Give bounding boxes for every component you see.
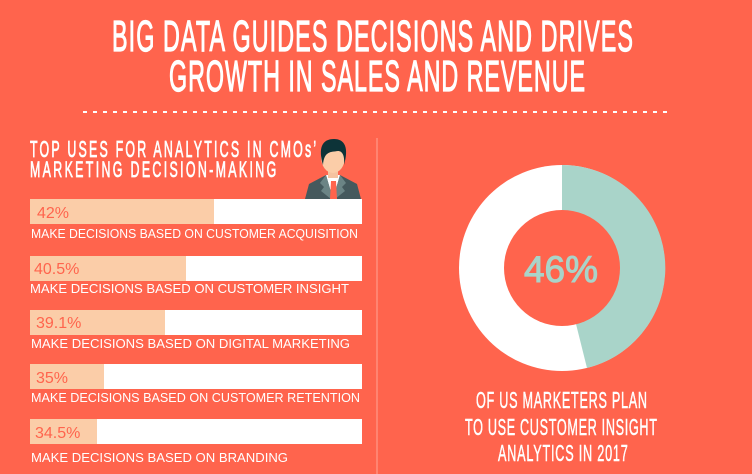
- chart heading: TOP USES FOR ANALYTICS IN CMOs’: [30, 136, 316, 162]
- donut caption: TO USE CUSTOMER INSIGHT: [465, 414, 657, 440]
- donut chart: [459, 165, 665, 371]
- bar: customer insight: MAKE DECISIONS BASED ON CUSTOMER INSIGHT: [30, 281, 349, 296]
- bar: customer acquisition: MAKE DECISIONS BASED ON CUSTOMER ACQUISITION: [31, 226, 358, 241]
- chart heading: MARKETING DECISION-MAKING: [30, 157, 276, 182]
- bar: customer acquisition: 42%: [37, 205, 69, 222]
- chart heading: [30, 136, 316, 182]
- bar: customer acquisition: [30, 199, 362, 241]
- icon: businessman: [305, 139, 361, 199]
- bar: customer retention: [30, 364, 362, 405]
- donut caption: [465, 387, 657, 466]
- title: [112, 12, 633, 101]
- bar: customer insight: 40.5%: [34, 261, 79, 278]
- bar: branding: [30, 419, 362, 465]
- bar: branding: 34.5%: [35, 425, 80, 442]
- bar: customer retention: MAKE DECISIONS BASED ON CUSTOMER RETENTION: [31, 390, 360, 405]
- bar: customer retention: 35%: [36, 370, 68, 387]
- bar: digital marketing: 39.1%: [36, 315, 81, 332]
- donut caption: OF US MARKETERS PLAN: [476, 387, 647, 413]
- title: BIG DATA GUIDES DECISIONS AND DRIVES: [112, 12, 633, 61]
- donut caption: ANALYTICS IN 2017: [498, 440, 628, 466]
- title: GROWTH IN SALES AND REVENUE: [169, 52, 585, 101]
- bar: digital marketing: [30, 310, 362, 351]
- donut chart: 46%: [524, 249, 598, 290]
- bar: digital marketing: MAKE DECISIONS BASED ON DIGITAL MARKETING: [31, 336, 350, 351]
- bar: branding: MAKE DECISIONS BASED ON BRANDING: [31, 450, 288, 465]
- bar: customer insight: [30, 256, 362, 296]
